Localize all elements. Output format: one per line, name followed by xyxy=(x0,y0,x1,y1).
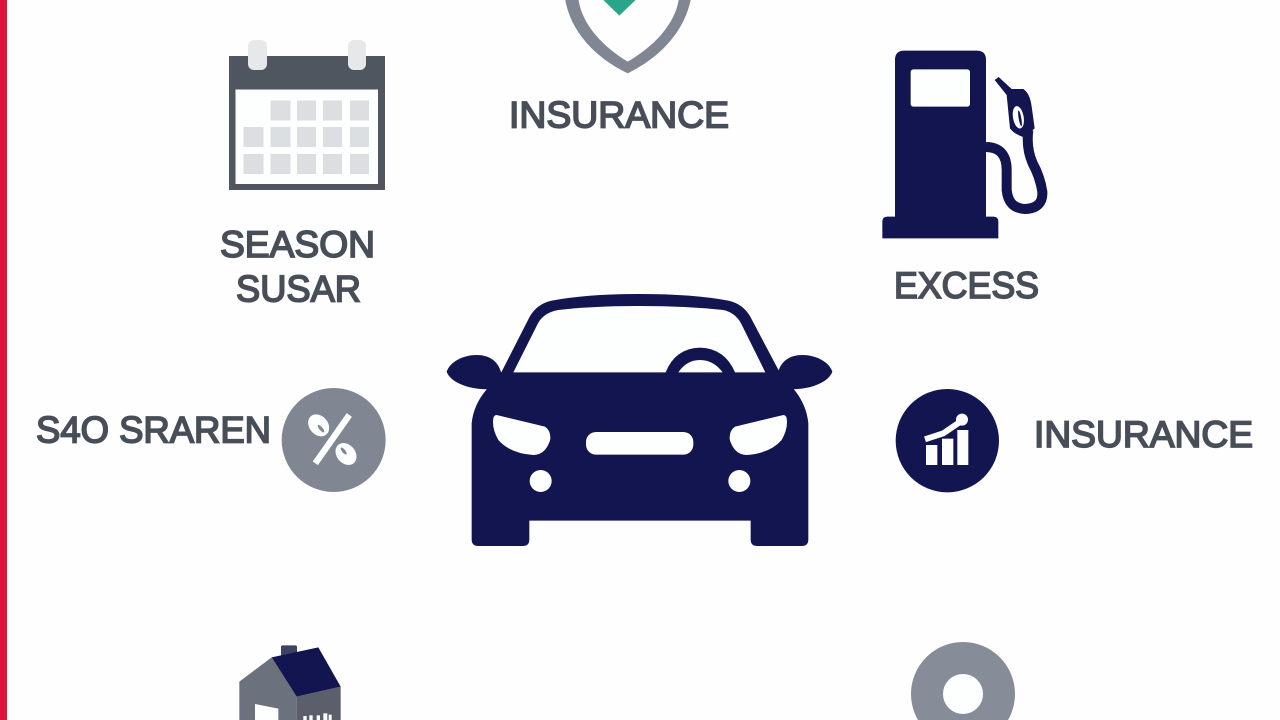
label: insurance top: INSURANCE xyxy=(509,94,729,136)
label: garbled left text: S4O SRAREN xyxy=(36,410,271,450)
label: season susar: SEASON xyxy=(220,224,375,265)
windshield xyxy=(513,306,765,372)
icon: house xyxy=(239,645,341,720)
headlights xyxy=(493,415,550,455)
icon: growth chart badge xyxy=(896,389,999,492)
dashboard dial xyxy=(665,348,735,373)
grille xyxy=(586,432,693,455)
icon: percent badge xyxy=(282,388,386,492)
label: season susar: SUSAR xyxy=(236,268,361,310)
icon: calendar xyxy=(229,40,385,190)
icon: fuel pump xyxy=(882,51,1042,238)
car body xyxy=(472,294,808,546)
red accent bar xyxy=(0,0,7,720)
label: insurance right: INSURANCE xyxy=(1034,414,1253,455)
icon: grey ring xyxy=(927,658,999,720)
label: excess: EXCESS xyxy=(894,265,1039,306)
icon: car front view xyxy=(447,294,832,546)
left mirror xyxy=(447,355,501,389)
icon: shield with green check xyxy=(565,0,691,73)
right mirror xyxy=(778,355,832,389)
fog lights xyxy=(530,470,552,492)
label: season susar xyxy=(220,224,375,310)
